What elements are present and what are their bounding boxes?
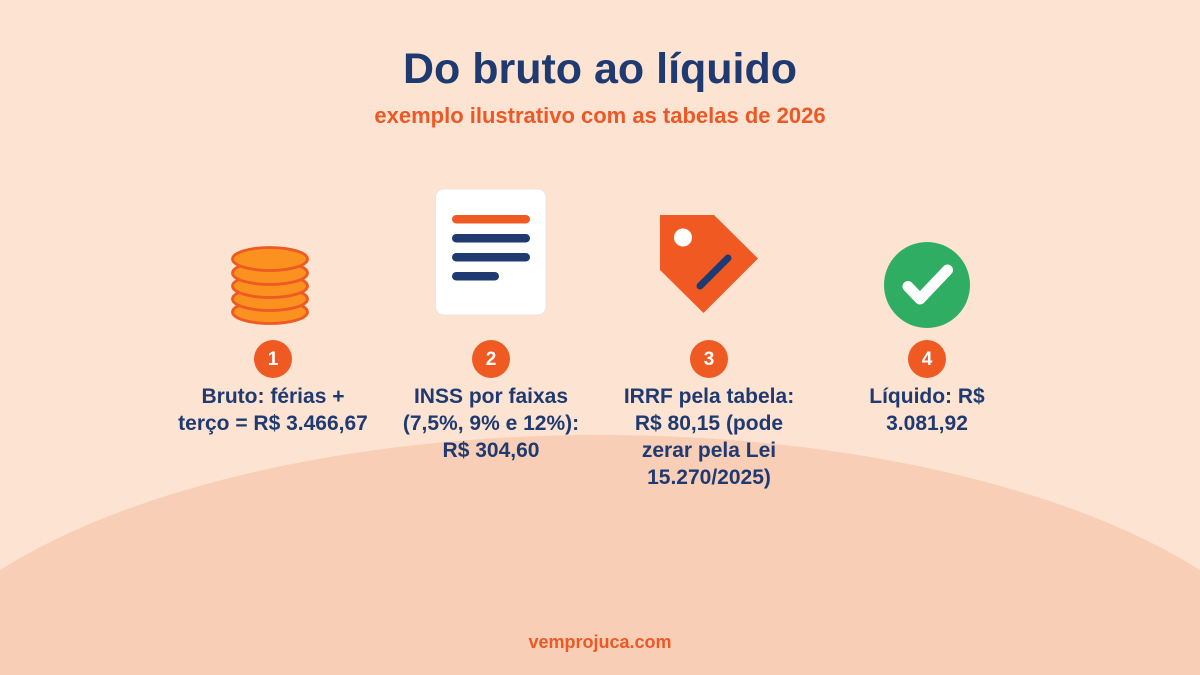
step number 3 xyxy=(690,340,728,378)
step 3 text: R$ 80,15 (pode xyxy=(635,412,783,435)
step number 4 xyxy=(908,340,946,378)
step 4 text: Líquido: R$ xyxy=(869,385,985,408)
step number 4: 4 xyxy=(922,349,932,370)
step 4 text xyxy=(869,385,985,435)
icon: check circle xyxy=(884,242,970,328)
icon: price tag xyxy=(660,215,758,313)
step number 2 xyxy=(472,340,510,378)
step 1 text xyxy=(178,385,368,435)
step 3 text: zerar pela Lei xyxy=(642,439,776,462)
step 3 text: 15.270/2025) xyxy=(647,466,771,489)
step 1 text: terço = R$ 3.466,67 xyxy=(178,412,368,435)
step 4 text: 3.081,92 xyxy=(886,412,968,435)
step number 1 xyxy=(254,340,292,378)
step number 2: 2 xyxy=(486,349,496,370)
step 3 text: IRRF pela tabela: xyxy=(624,385,794,408)
step 1 text: Bruto: férias + xyxy=(202,385,344,408)
subtitle: exemplo ilustrativo com as tabelas de 2026 xyxy=(374,103,826,128)
footer: vemprojuca.com xyxy=(528,632,672,652)
step 2 text: R$ 304,60 xyxy=(443,439,539,462)
icon: coin stack xyxy=(231,246,309,325)
step 3 text xyxy=(624,385,794,489)
icon: document xyxy=(436,190,546,314)
step 2 text xyxy=(403,385,579,462)
title: Do bruto ao líquido xyxy=(403,45,797,93)
step number 3: 3 xyxy=(704,349,714,370)
step number 1: 1 xyxy=(268,349,278,370)
step 2 text: (7,5%, 9% e 12%): xyxy=(403,412,579,435)
step 2 text: INSS por faixas xyxy=(414,385,568,408)
